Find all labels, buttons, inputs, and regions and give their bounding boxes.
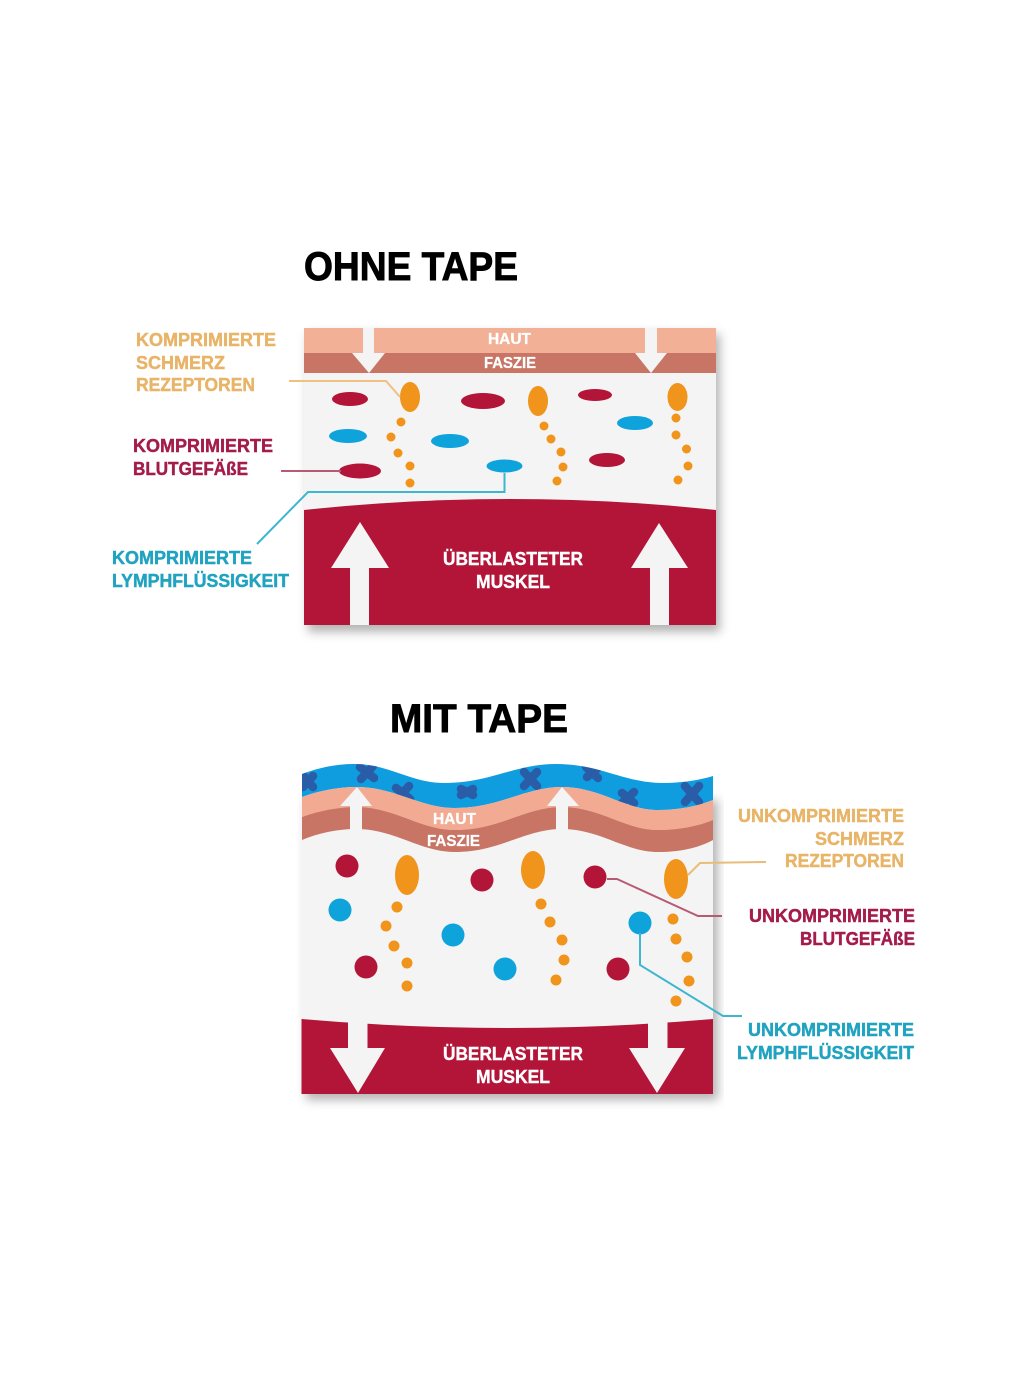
callout line: blood vessels	[607, 879, 722, 916]
label: haut: HAUT	[488, 331, 532, 348]
callout: unkomprimierte schmerzrezeptoren	[738, 806, 904, 871]
callout: unkomprimierte blutgefäße: BLUTGEFÄßE	[800, 929, 915, 949]
layer: haut	[304, 328, 716, 353]
label: muscle: MUSKEL	[476, 1067, 550, 1087]
panel: ohne tape diagram	[304, 328, 720, 632]
arrow: down right	[629, 1015, 685, 1093]
callout: komprimierte blutgefäße: KOMPRIMIERTE	[133, 436, 273, 456]
arrow: down left	[352, 328, 385, 373]
arrow: down right	[635, 328, 667, 373]
label: muscle	[443, 549, 583, 592]
callout line: lymph	[640, 933, 742, 1016]
callout: komprimierte lymphflüssigkeit	[112, 548, 289, 591]
callout: unkomprimierte lymphflüssigkeit	[737, 1020, 914, 1063]
arrow: up right	[631, 523, 688, 625]
callout: komprimierte blutgefäße	[133, 436, 273, 479]
label: muscle: ÜBERLASTETER	[443, 549, 583, 569]
callout line: blood vessels	[281, 470, 341, 472]
pain receptors	[380, 851, 694, 1006]
tape pattern	[302, 766, 699, 803]
label: muscle	[443, 1044, 583, 1087]
callout: unkomprimierte blutgefäße	[749, 906, 915, 949]
label: muscle: MUSKEL	[476, 572, 550, 592]
callout line: receptors	[289, 381, 400, 397]
muscle	[304, 499, 716, 625]
label: faszie: FASZIE	[484, 355, 536, 372]
title: ohne tape: OHNE TAPE	[304, 245, 518, 289]
layer: faszie	[302, 807, 713, 852]
callout: komprimierte schmerzrezeptoren: REZEPTOREN	[136, 375, 255, 395]
callout: komprimierte blutgefäße: BLUTGEFÄßE	[133, 459, 248, 479]
callout: unkomprimierte lymphflüssigkeit: LYMPHFLÜSSIGKEIT	[737, 1043, 914, 1063]
callout line: receptors	[688, 862, 766, 875]
uncompressed blood vessels	[336, 854, 630, 980]
callout: unkomprimierte schmerzrezeptoren: UNKOMPRIMIERTE	[738, 806, 904, 826]
compressed lymph vessels	[329, 416, 653, 472]
arrow: up left	[340, 787, 372, 835]
callout: komprimierte schmerzrezeptoren: KOMPRIMIERTE	[136, 330, 276, 350]
layer: faszie	[304, 353, 716, 373]
callout: unkomprimierte blutgefäße: UNKOMPRIMIERTE	[749, 906, 915, 926]
title: mit tape: MIT TAPE	[390, 697, 568, 741]
callout: komprimierte lymphflüssigkeit: LYMPHFLÜSSIGKEIT	[112, 571, 289, 591]
arrow: up right	[547, 787, 579, 835]
callout: komprimierte schmerzrezeptoren: SCHMERZ	[136, 353, 225, 373]
compressed blood vessels	[332, 389, 625, 478]
callout: unkomprimierte schmerzrezeptoren: REZEPTOREN	[785, 851, 904, 871]
panel: mit tape diagram	[300, 764, 724, 1106]
layer: haut	[302, 787, 713, 830]
label: faszie: FASZIE	[427, 833, 480, 850]
callout: komprimierte schmerzrezeptoren	[136, 330, 276, 395]
callout: unkomprimierte schmerzrezeptoren: SCHMERZ	[815, 829, 904, 849]
arrow: up left	[331, 522, 389, 625]
uncompressed lymph vessels	[328, 898, 652, 980]
label: muscle: ÜBERLASTETER	[443, 1044, 583, 1064]
pain receptors	[386, 382, 692, 488]
label: haut: HAUT	[433, 811, 477, 828]
callout: komprimierte lymphflüssigkeit: KOMPRIMIERTE	[112, 548, 252, 568]
callout line: lymph	[257, 473, 504, 544]
layer: kinesio tape	[302, 764, 713, 810]
muscle	[302, 1019, 713, 1094]
arrow: down left	[330, 1015, 385, 1093]
callout: unkomprimierte lymphflüssigkeit: UNKOMPRIMIERTE	[748, 1020, 914, 1040]
